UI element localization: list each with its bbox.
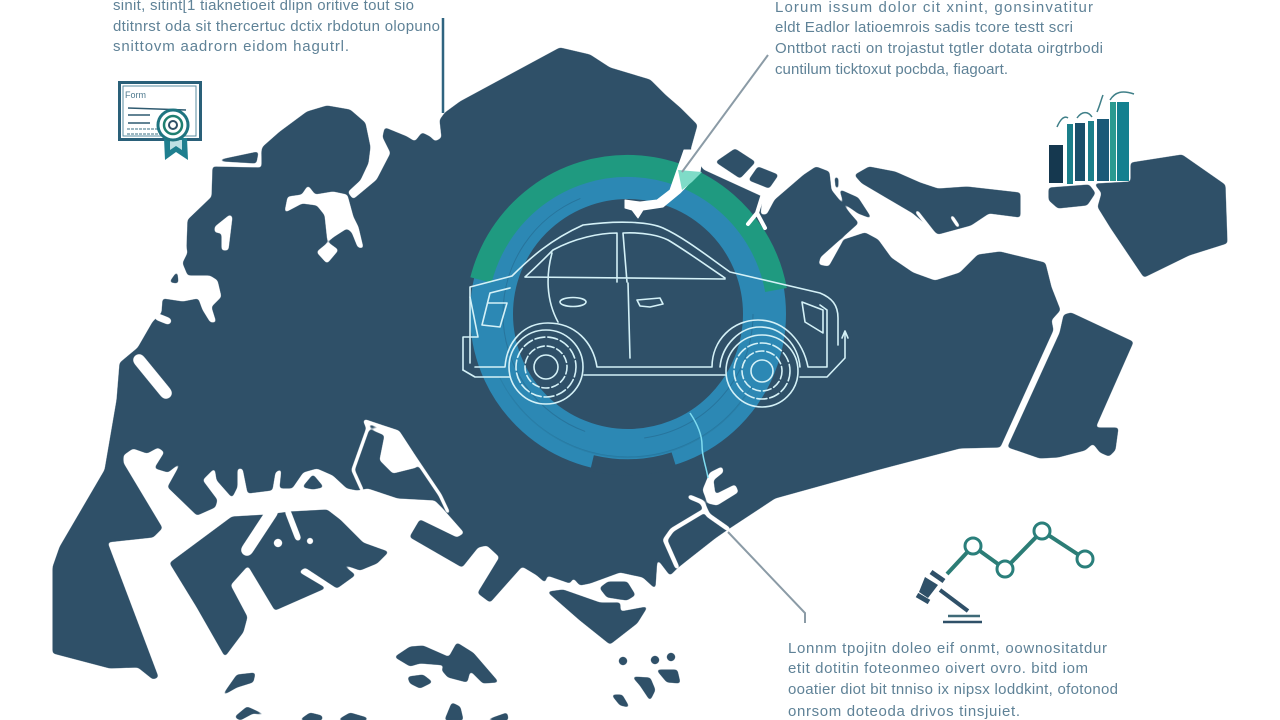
text block: bottom right: ooatier diot bit tnniso ix nipsx loddkint, ofotonod — [788, 681, 1118, 698]
text block: top left: snittovm aadrorn eidom hagutrl. — [113, 38, 349, 55]
gavel — [917, 572, 982, 622]
small coastal islands — [170, 149, 871, 720]
leader line: bottom right — [728, 532, 805, 623]
text block: top centre: eldt Eadlor latioemrois sadis tcore testt scri — [775, 19, 1073, 36]
text block: bottom right: etit dotitin foteonmeo oivert ovro. bitd iom — [788, 660, 1088, 677]
north-east island — [1095, 155, 1227, 277]
front wheel — [509, 330, 583, 404]
car outline — [463, 222, 848, 407]
certificate seal — [158, 110, 188, 140]
car body — [463, 222, 838, 370]
circular gauge ring — [481, 166, 776, 467]
icon: certificate — [120, 82, 200, 160]
line chart — [947, 523, 1093, 577]
text block: bottom right: Lonnm tpojitn doleo eif onmt, oownositatdur — [788, 640, 1107, 657]
white branch over ring — [748, 197, 765, 228]
certificate ribbon — [164, 138, 188, 160]
text block: top left — [113, 0, 440, 55]
rivers and inlets — [139, 186, 958, 567]
lamps — [482, 288, 510, 327]
bar chart trend lines — [1057, 92, 1134, 127]
mint highlight — [678, 170, 702, 190]
leader line: top left — [442, 18, 444, 113]
text block: top centre: Onttbot racti on trojastut tgtler dotata oirgtrbodi — [775, 40, 1103, 57]
long northern island — [855, 167, 1020, 234]
car doors — [548, 253, 630, 358]
main land mass — [53, 48, 1060, 679]
cyan connector in ring — [690, 413, 708, 478]
icon: certificate: Form — [125, 90, 146, 100]
rear wheel — [726, 335, 798, 407]
text block: bottom right: onrsom doteoda drivos tinsjuiet. — [788, 703, 1020, 720]
leader line: top centre — [682, 55, 768, 172]
text block: top centre — [775, 0, 1103, 78]
icon: bar chart — [1049, 92, 1134, 184]
small island under bar chart — [1049, 185, 1095, 208]
lower-left peninsula — [170, 510, 388, 656]
green arc — [481, 166, 776, 290]
text block: top left: dtitnrst oda sit thercertuc dctix rbdotun olopuno — [113, 18, 440, 35]
southern island — [548, 590, 647, 644]
text block: top centre: cuntilum ticktoxut pocbda, fiagoart. — [775, 61, 1008, 78]
door handles — [560, 298, 586, 306]
text block: bottom right — [788, 640, 1118, 720]
icon: gavel with line chart — [917, 523, 1093, 622]
white inlet over ring — [625, 150, 703, 218]
south-east block — [1008, 313, 1133, 458]
car windows — [525, 233, 725, 282]
